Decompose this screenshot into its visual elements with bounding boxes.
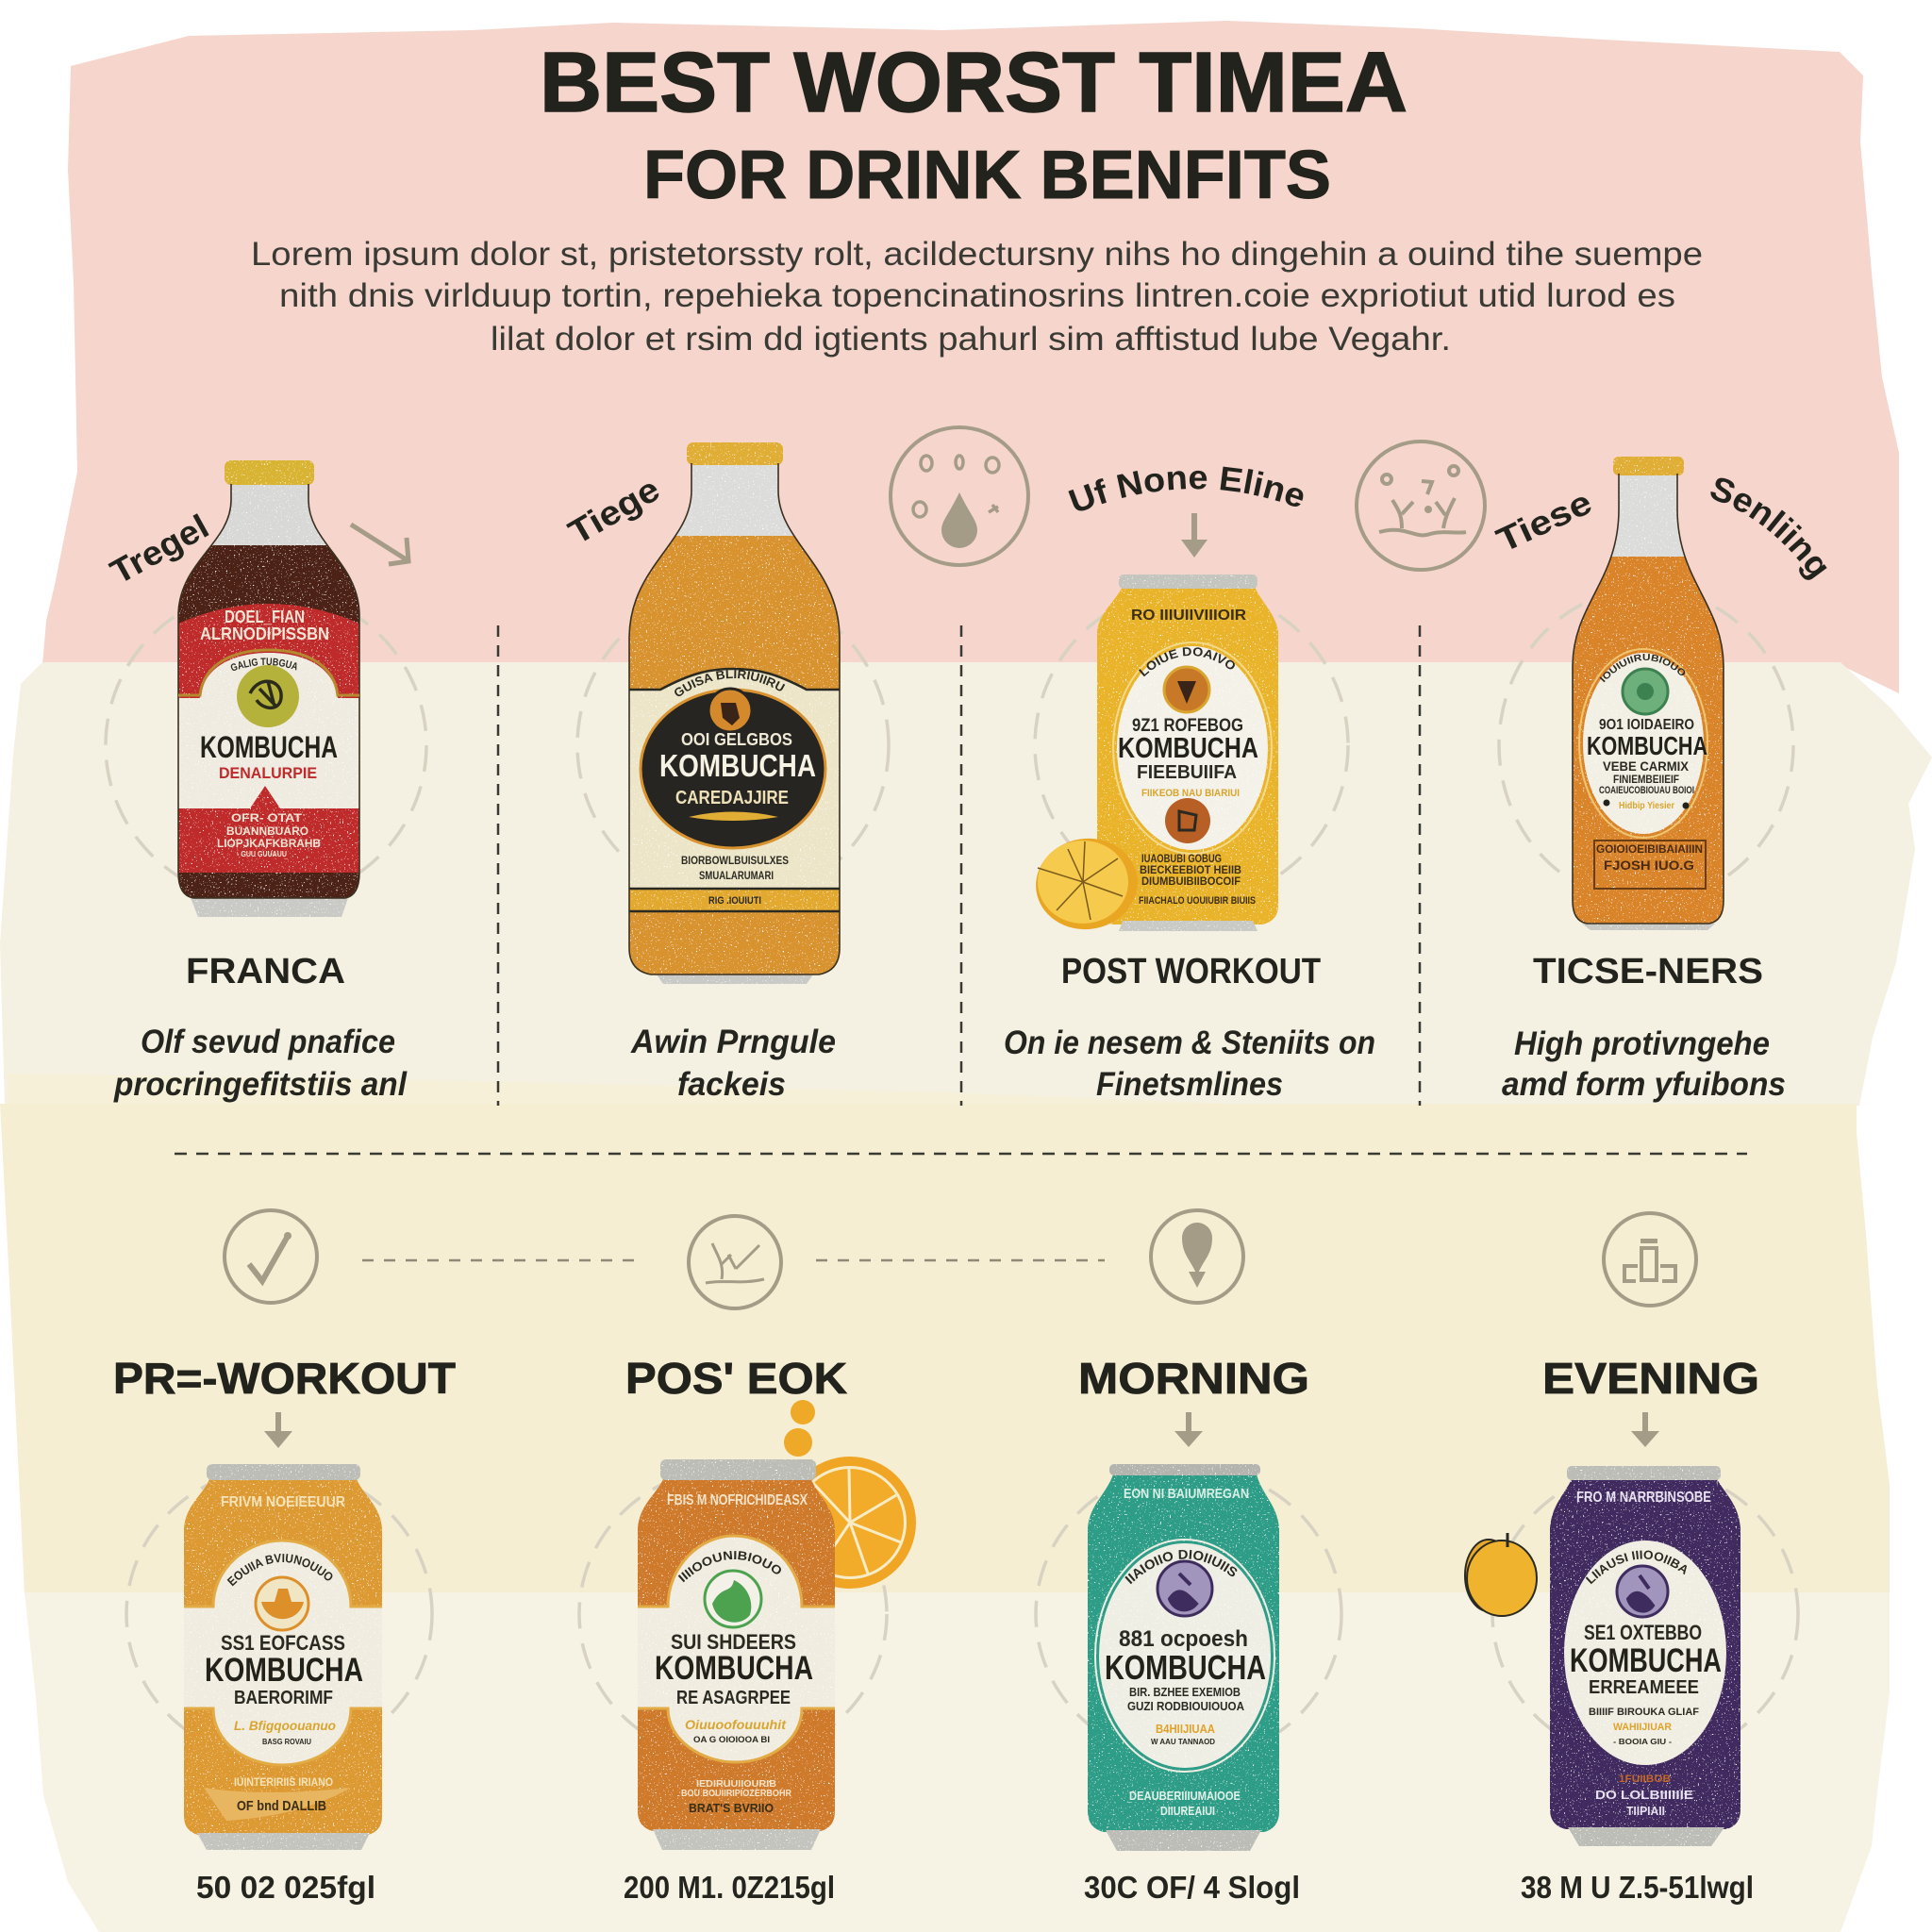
volume captions: 50 02 025fgl xyxy=(196,1870,375,1905)
rotated label: Tiese: Tiese xyxy=(1491,482,1597,559)
dashed halo circles xyxy=(106,589,1798,1760)
emblem xyxy=(256,1577,308,1630)
label text: KOMBUCHA xyxy=(1570,1642,1722,1679)
icon: sprout circle xyxy=(1357,441,1485,570)
icon: sprout circle small xyxy=(689,1216,781,1308)
label text: OOI GELGBOS xyxy=(681,730,792,749)
label text: GUZI RODBIOUIOUOA xyxy=(1127,1699,1245,1713)
volume captions: 30C OF/ 4 Slogl xyxy=(1084,1870,1300,1905)
label text: SUI SHDEERS xyxy=(671,1630,796,1654)
label text: DEAUBERIIIUMAIOOE xyxy=(1129,1789,1241,1803)
label text: 9O1 IOIDAEIRO xyxy=(1599,717,1694,733)
intro paragraph: nith dnis virlduup tortin, repehieka topencinatinosrins lintren.coie expriotiut utid lurod es xyxy=(279,277,1675,314)
rotated label: Tregel: Tregel xyxy=(104,507,215,591)
label text: IOUIUIIRUBIOUO xyxy=(1600,654,1685,683)
label text: VEBE CARMIX xyxy=(1603,758,1690,774)
label text: - BOOIA GIU - xyxy=(1613,1738,1672,1746)
volume captions: 200 M1. 0Z215gl xyxy=(624,1870,835,1905)
icon: bottles circle xyxy=(1604,1213,1696,1306)
label text xyxy=(200,608,338,858)
label text: RO IIIUIIVIIIOIR xyxy=(1131,608,1246,624)
icon: pin circle xyxy=(1151,1210,1243,1303)
label text xyxy=(659,670,816,907)
column headings xyxy=(186,952,1763,991)
label text xyxy=(1587,654,1707,873)
label text: BAERORIMF xyxy=(234,1688,333,1708)
emblem circles xyxy=(1164,667,1209,712)
label text: DO LOLBIIIIIIE xyxy=(1595,1788,1693,1802)
label text: IIAIOIIO DIOIIUIIS xyxy=(1124,1550,1238,1585)
label text: OFR- OTAT xyxy=(231,811,303,824)
label text xyxy=(205,1494,363,1814)
label text: BOU BOUIIRIPIOZERBOHR xyxy=(681,1789,792,1799)
background: pale yellow torn paper xyxy=(0,1104,1890,1594)
label text: TIIPIAII xyxy=(1626,1804,1665,1818)
column descriptions: amd form yfuibons xyxy=(1502,1066,1786,1103)
label text: DENALURPIE xyxy=(219,764,317,782)
label text xyxy=(1105,1486,1266,1818)
intro paragraph: Lorem ipsum dolor st, pristetorssty rolt, acildectursny nihs ho dingehin a ouind tihe suempe xyxy=(251,236,1703,273)
label text: FRIVM NOEIEEUUR xyxy=(221,1494,345,1510)
label text: Oiuuoofouuuhit xyxy=(685,1717,787,1732)
label text: RE ASAGRPEE xyxy=(676,1688,791,1708)
volume captions: 38 M U Z.5-51lwgl xyxy=(1521,1870,1754,1905)
label text: BIORBOWLBUISULXES xyxy=(681,854,789,867)
label text xyxy=(1118,608,1258,907)
label text: OA G OIOIOOA BI xyxy=(693,1735,770,1744)
label text: BIECKEEBIOT HEIIB xyxy=(1140,863,1241,876)
label text: DOEL_FIAN xyxy=(225,608,305,626)
bottle 2: amber kombucha xyxy=(628,442,841,984)
label text: DIIUREAIUI xyxy=(1160,1804,1215,1818)
label text: FRO M NARRBINSOBE xyxy=(1576,1490,1711,1506)
label text: FINIEMBEIIEIF xyxy=(1613,773,1679,786)
bottle 1: red and brown kombucha xyxy=(177,460,360,917)
column descriptions: Finetsmlines xyxy=(1096,1066,1283,1103)
can 3: yellow post-workout kombucha xyxy=(1036,575,1278,931)
label text: FIEEBUIIFA xyxy=(1137,762,1237,783)
label text: GALIG TUBGUA xyxy=(230,658,296,671)
title: BEST WORST TIMEA xyxy=(540,36,1407,130)
dashed connector 2 xyxy=(816,1259,1105,1261)
label text: SS1 EOFCASS xyxy=(221,1631,345,1655)
label text: - GUU GUUAUU xyxy=(237,850,287,858)
background: pale yellow left seam xyxy=(8,1074,1226,1113)
column descriptions: fackeis xyxy=(677,1066,786,1103)
can A: amber pre-workout xyxy=(184,1464,382,1850)
brown emblem xyxy=(708,689,752,732)
label text: BRAT'S BVRIIO xyxy=(689,1801,774,1815)
label text: CAREDAJJIRE xyxy=(675,788,789,808)
label text: EON NI BAIUMREGAN xyxy=(1124,1486,1249,1502)
purple emblem xyxy=(1158,1561,1212,1616)
volume captions xyxy=(196,1870,1754,1905)
label text xyxy=(655,1492,813,1815)
green emblem xyxy=(237,665,299,727)
label text: FIIACHALO UOUIUBIR BIUIIS xyxy=(1139,895,1256,907)
label text xyxy=(1570,1490,1722,1818)
black seal xyxy=(641,690,825,848)
label text: 9Z1 ROFEBOG xyxy=(1132,716,1243,736)
label text: KOMBUCHA xyxy=(1105,1648,1266,1687)
label text: GUISA BLIRIUIIRU xyxy=(675,670,785,696)
bottom headings: PR=-WORKOUT xyxy=(113,1354,456,1403)
column descriptions: On ie nesem & Steniits on xyxy=(1004,1024,1375,1061)
arrow above can xyxy=(1181,513,1208,558)
icon: droplet circle xyxy=(891,427,1028,565)
label text: IUINTERIRIIS IRIANO xyxy=(234,1775,333,1789)
label text: LIOPJKAFKBRAHB xyxy=(217,837,321,850)
label text: IEDIRUUIIOURIB xyxy=(696,1779,776,1790)
purple emblem xyxy=(1617,1566,1668,1617)
arrows under headings xyxy=(264,1412,1659,1448)
bottom headings xyxy=(113,1354,1759,1403)
label text: KOMBUCHA xyxy=(659,748,816,783)
subtitle: FOR DRINK BENFITS xyxy=(643,138,1331,213)
label text: FIIKEOB NAU BIARIUI xyxy=(1141,788,1240,799)
column descriptions: High protivngehe xyxy=(1514,1025,1770,1062)
bottle 4: orange kombucha xyxy=(1572,457,1724,930)
label text: GOIOIOEIBIBAIAIIIN xyxy=(1596,842,1703,856)
label text: OF bnd DALLIB xyxy=(237,1798,326,1814)
bottom headings: EVENING xyxy=(1542,1354,1759,1403)
label text: ALRNODIPISSBN xyxy=(200,625,329,643)
label text: ERREAMEEE xyxy=(1589,1677,1699,1698)
label text: SE1 OXTEBBO xyxy=(1584,1621,1702,1644)
can D: purple evening xyxy=(1550,1466,1740,1846)
bottom headings: MORNING xyxy=(1078,1354,1309,1403)
column descriptions: Awin Prngule xyxy=(630,1024,836,1060)
curved label: Uf None Eline: Uf None Eline xyxy=(1068,466,1304,511)
intro paragraph: lilat dolor et rsim dd igtients pahurl sim afftistud lube Vegahr. xyxy=(491,321,1451,358)
orange slice xyxy=(1030,832,1143,936)
arrow beside bottle 1 xyxy=(351,525,408,564)
label text: KOMBUCHA xyxy=(1118,731,1258,764)
lower label box xyxy=(1594,841,1706,889)
label text: EOUIIA BVIUNOUUO xyxy=(226,1553,332,1587)
background: lower cream torn paper xyxy=(25,1592,1890,1932)
column headings: TICSE-NERS xyxy=(1533,952,1763,991)
label text: KOMBUCHA xyxy=(1587,731,1707,760)
column headings: POST WORKOUT xyxy=(1061,952,1321,991)
label text: Hidbip Yiesier xyxy=(1619,801,1674,811)
label text: BASG ROVAIU xyxy=(262,1738,311,1746)
apricot xyxy=(1465,1533,1537,1616)
label text: KOMBUCHA xyxy=(655,1650,813,1687)
bottom headings: POS' EOK xyxy=(625,1354,847,1403)
column descriptions: procringefitstiis anl xyxy=(113,1066,408,1103)
green emblem xyxy=(1623,669,1668,714)
curved label: Senliing: Senliing xyxy=(1710,477,1827,580)
label text: BIIIIF BIROUKA GLIAF xyxy=(1589,1707,1699,1718)
background: pink torn paper xyxy=(42,21,1899,693)
label text: KOMBUCHA xyxy=(205,1652,363,1689)
column descriptions: Olf sevud pnafice xyxy=(141,1024,395,1060)
column descriptions xyxy=(113,1024,1786,1103)
dashed connector 1 xyxy=(362,1259,635,1261)
label text: LIIAUSI IIIOOIIBA xyxy=(1585,1551,1687,1585)
label text: KOMBUCHA xyxy=(200,730,338,764)
label text: IUAOBUBI GOBUG xyxy=(1141,852,1222,865)
background: cream torn paper xyxy=(0,662,1932,1106)
label text: IIIIOOUNIBIOUO xyxy=(677,1551,781,1583)
label text: FBIS M NOFRICHIDEASX xyxy=(667,1492,808,1508)
label text: BIR. BZHEE EXEMIOB xyxy=(1129,1685,1241,1699)
label text: RIG .IOUIUTI xyxy=(708,895,761,907)
column dividers xyxy=(498,625,1420,1106)
label text: 881 ocpoesh xyxy=(1119,1626,1248,1652)
intro paragraph xyxy=(251,236,1703,358)
bubbles xyxy=(784,1400,815,1457)
label text: L. Bfigqoouanuo xyxy=(234,1718,336,1733)
label text: BUANNBUARO xyxy=(226,824,308,838)
label text: 1FUIIBOB xyxy=(1619,1774,1671,1785)
label text: FJOSH IUO.G xyxy=(1604,858,1694,873)
label text: WAHIIJIUAR xyxy=(1613,1722,1672,1733)
column headings: FRANCA xyxy=(186,952,345,991)
label text: LOIUE DOAIVO xyxy=(1139,647,1235,677)
label text: COAIEUCOBIOUAU BOIOI xyxy=(1599,785,1694,796)
orange slice behind can B xyxy=(784,1457,916,1589)
can C: teal morning xyxy=(1088,1464,1279,1851)
section divider xyxy=(175,1153,1747,1155)
green emblem xyxy=(705,1571,761,1627)
icon: check circle xyxy=(225,1210,317,1303)
label text: DIUMBUIBIIBOCOIF xyxy=(1141,874,1241,888)
label text: B4HIIJIUAA xyxy=(1156,1722,1216,1736)
label text: SMUALARUMARI xyxy=(699,869,774,882)
label text: W AAU TANNAOD xyxy=(1151,1738,1215,1746)
can B: orange post-workout xyxy=(638,1459,835,1850)
rotated label: Tiege: Tiege xyxy=(562,469,666,552)
